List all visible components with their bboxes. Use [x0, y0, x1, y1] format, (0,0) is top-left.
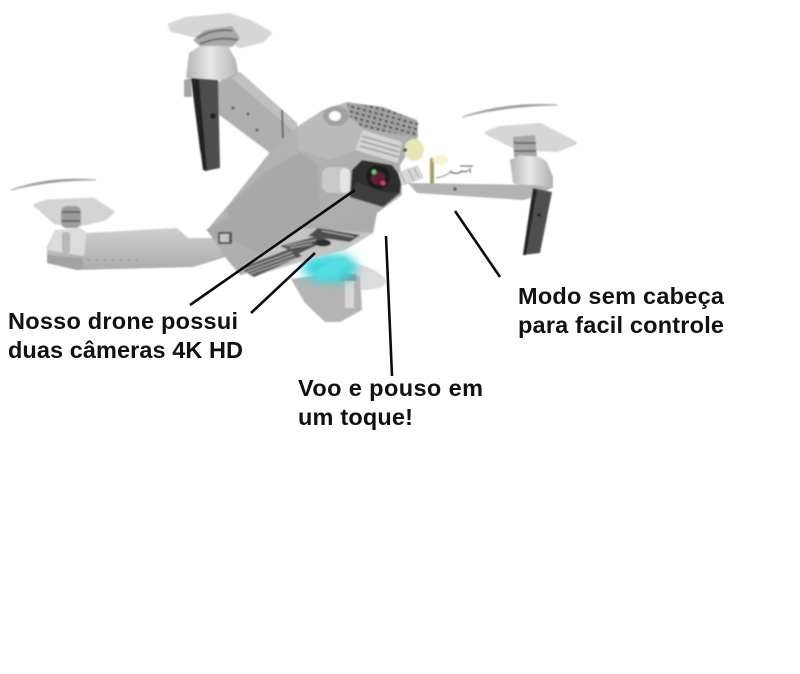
drone illustration — [11, 15, 575, 322]
callout text: cameras: duas câmeras 4K HD — [8, 337, 243, 363]
right folded leg — [523, 188, 552, 255]
callout text: one touch takeoff: Voo e pouso em — [298, 375, 483, 401]
vent under the battery — [240, 228, 373, 277]
cyan landing glow — [302, 253, 358, 283]
drone rear propeller and arm — [291, 262, 386, 322]
left propeller — [35, 199, 113, 228]
headlight — [323, 106, 349, 126]
callout text: headless mode: Modo sem cabeça — [518, 283, 725, 309]
top-left arm — [218, 72, 298, 159]
right propeller — [487, 125, 575, 157]
front camera module — [350, 160, 402, 207]
brand mark — [436, 166, 473, 178]
callout line: headless mode — [455, 211, 500, 277]
right arm — [408, 183, 553, 200]
right propeller motion arc — [462, 104, 557, 117]
right motor — [510, 155, 553, 189]
callout text: cameras: Nosso drone possui — [8, 308, 238, 334]
top vent — [355, 130, 402, 163]
camera gimbal knob — [322, 167, 350, 193]
top-left motor — [186, 46, 240, 84]
drone main body — [206, 102, 418, 277]
left arm — [47, 225, 232, 270]
callout text: one touch takeoff: um toque! — [298, 404, 413, 430]
callout line: second camera — [251, 253, 315, 313]
callout line: one touch takeoff — [386, 236, 392, 376]
callout text: headless mode: para facil controle — [518, 312, 724, 338]
callout line: cameras — [190, 190, 355, 305]
top-left folded leg — [184, 78, 220, 171]
top-left propeller — [170, 15, 270, 47]
left propeller motion arc — [11, 179, 96, 190]
nose grille — [347, 103, 418, 137]
front gimbal bracket and yellow light — [398, 139, 448, 186]
